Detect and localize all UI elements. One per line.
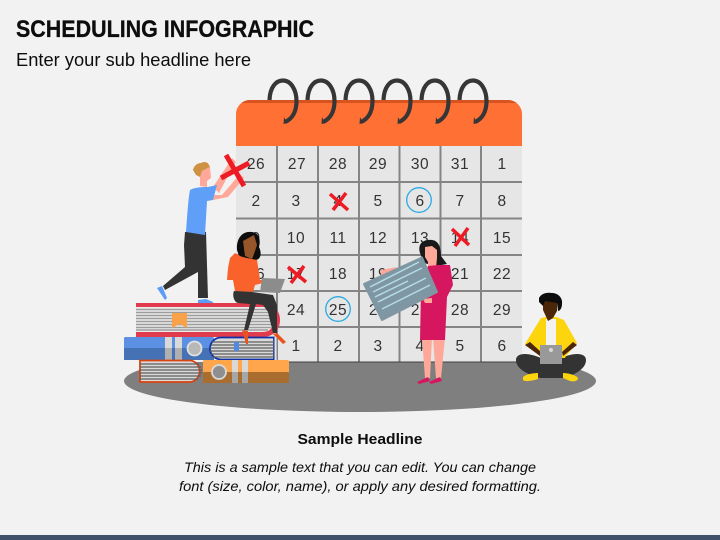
- date numbers: 1: [497, 156, 507, 173]
- date numbers: 31: [451, 156, 469, 173]
- hair: [193, 162, 210, 177]
- date numbers: 17: [287, 266, 305, 283]
- dress: [420, 265, 453, 340]
- laptop: [540, 345, 562, 364]
- date numbers: 20: [411, 266, 429, 283]
- legs: [422, 338, 445, 378]
- date numbers: 28: [329, 156, 347, 173]
- bottom book: [140, 360, 289, 383]
- date numbers: 5: [373, 193, 383, 210]
- calendar header: [236, 100, 522, 146]
- books stack: [124, 303, 289, 383]
- date numbers: 27: [288, 156, 306, 173]
- hair: [539, 293, 562, 311]
- date numbers: 12: [369, 230, 387, 247]
- date numbers: 16: [247, 266, 265, 283]
- date numbers: 29: [369, 156, 387, 173]
- crossed legs: [516, 354, 586, 378]
- date numbers: 22: [493, 266, 511, 283]
- red cross marks on dates: [288, 193, 469, 283]
- shoes: [523, 373, 578, 381]
- date numbers: 11: [329, 230, 347, 247]
- date numbers: 24: [287, 302, 305, 319]
- woman holding board: [364, 240, 453, 384]
- hair: [237, 232, 261, 260]
- trousers: [233, 291, 277, 333]
- shirt: [186, 185, 217, 235]
- woman with laptop: [227, 232, 286, 344]
- face: [243, 235, 257, 259]
- date numbers: 4: [333, 193, 343, 210]
- date numbers: 23: [247, 302, 265, 319]
- date numbers: 15: [493, 230, 511, 247]
- date numbers: 9: [251, 230, 261, 247]
- date numbers: 2: [333, 338, 343, 355]
- date numbers: 30: [247, 338, 265, 355]
- jacket: [525, 317, 577, 358]
- date numbers: 25: [329, 302, 347, 319]
- arms: [525, 342, 577, 356]
- top book: [136, 303, 280, 337]
- face and neck: [425, 246, 437, 268]
- date numbers: 27: [411, 302, 429, 319]
- arms: [213, 158, 244, 200]
- shoes: [417, 377, 442, 384]
- man marking the calendar: [157, 155, 249, 303]
- date numbers: 3: [291, 193, 301, 210]
- middle book: [124, 337, 276, 360]
- date numbers: 26: [247, 156, 265, 173]
- footer bar: [0, 535, 720, 540]
- date numbers: 6: [497, 338, 507, 355]
- hair: [419, 240, 447, 266]
- date numbers: 10: [287, 230, 305, 247]
- legs: [163, 232, 208, 298]
- date numbers: 26: [369, 302, 387, 319]
- bookmark: [172, 313, 187, 328]
- sample headline: Sample Headline: [298, 431, 422, 448]
- date numbers: 6: [415, 193, 425, 210]
- blue date circles: [326, 188, 431, 321]
- date numbers: 7: [455, 193, 465, 210]
- date numbers: 19: [369, 266, 387, 283]
- top: [227, 253, 265, 292]
- hands: [381, 267, 432, 303]
- date numbers: 28: [451, 302, 469, 319]
- title: SCHEDULING INFOGRAPHIC: [16, 16, 314, 43]
- ground ellipse: [124, 362, 596, 412]
- board: [364, 258, 437, 320]
- man sitting with laptop: [516, 293, 586, 381]
- large red cross: [221, 155, 249, 186]
- date numbers: 8: [497, 193, 507, 210]
- body text: This is a sample text that you can edit. You can change: [184, 459, 536, 475]
- binder rings: [270, 80, 486, 122]
- body text: font (size, color, name), or apply any desired formatting.: [179, 478, 541, 494]
- date numbers: [247, 156, 511, 355]
- shirt: [546, 319, 556, 347]
- date numbers: 29: [493, 302, 511, 319]
- ring tips: [284, 117, 477, 124]
- shoes: [242, 330, 286, 344]
- shoes: [157, 286, 213, 303]
- date numbers: 18: [329, 266, 347, 283]
- date numbers: 2: [251, 193, 261, 210]
- head: [543, 300, 557, 321]
- body text: [179, 459, 541, 494]
- subtitle: Enter your sub headline here: [16, 50, 251, 70]
- date numbers: 21: [451, 266, 469, 283]
- date numbers: 3: [373, 338, 383, 355]
- date numbers: 1: [291, 338, 301, 355]
- laptop: [260, 278, 285, 293]
- date numbers: 4: [415, 338, 425, 355]
- calendar grid: [236, 146, 522, 362]
- date numbers: 14: [451, 230, 469, 247]
- date numbers: 13: [411, 230, 429, 247]
- date numbers: 30: [411, 156, 429, 173]
- calendar: [236, 80, 522, 362]
- head: [200, 167, 211, 187]
- date numbers: 5: [455, 338, 465, 355]
